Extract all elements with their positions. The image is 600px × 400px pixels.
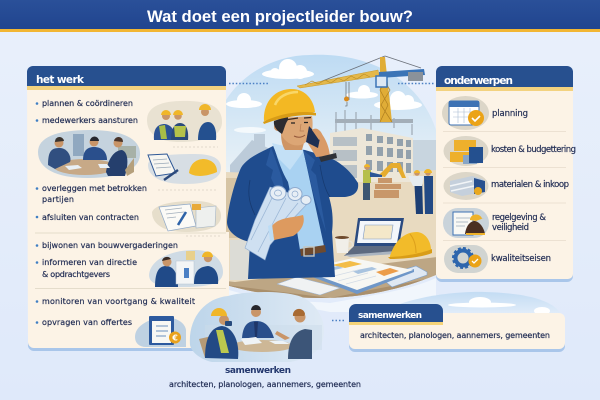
belt	[300, 245, 326, 256]
excavator	[378, 163, 406, 178]
cloud backdrop	[380, 292, 562, 316]
task list: bijwonen van bouwvergaderingen	[42, 241, 178, 250]
caption: samenwerken: samenwerken	[225, 366, 291, 376]
clouds	[226, 59, 422, 133]
shirt	[275, 149, 324, 250]
topic: materialen & inkoop	[444, 172, 569, 200]
documents on table	[277, 258, 427, 295]
task list: monitoren van voortgang & kwaliteit	[42, 297, 195, 306]
skyline	[230, 134, 436, 172]
illustration: quote checklist	[135, 316, 186, 347]
topic: kosten & budgettering	[444, 136, 576, 166]
illustration: quote checklist: €	[171, 334, 178, 342]
task list: informeren van directie	[42, 258, 137, 267]
task list: medewerkers aansturen	[42, 116, 138, 125]
caption: samenwerken: architecten, planologen, aannemers, gemeenten	[169, 380, 361, 389]
hand holding plans	[272, 215, 304, 240]
caption: samenwerken	[169, 366, 361, 389]
laptop	[344, 218, 404, 257]
illustration: clipboard and hard hat	[148, 154, 221, 184]
panel heading	[436, 66, 573, 91]
task list: afsluiten van contracten	[42, 213, 139, 222]
panel heading: onderwerpen	[444, 75, 513, 87]
topic: kosten & budgettering: kosten & budgettering	[491, 145, 576, 155]
topic: kwaliteitseisen: kwaliteitseisen	[491, 254, 551, 264]
panel: het werk	[27, 66, 229, 351]
blueprint rolls	[245, 186, 311, 260]
task list: plannen & coördineren	[42, 99, 133, 108]
title: Wat doet een projectleider bouw?	[147, 8, 413, 26]
ground	[226, 170, 436, 300]
task list: overleggen met betrokken	[42, 184, 147, 193]
title banner	[0, 0, 600, 32]
connector dots right	[398, 82, 434, 84]
cloud under central scene	[229, 278, 436, 312]
worker in safety vest	[363, 164, 382, 200]
illustration: meeting	[38, 130, 140, 178]
two site managers with plan	[408, 169, 433, 214]
coffee cup	[335, 236, 353, 253]
bricks	[374, 178, 401, 198]
task list: opvragen van offertes	[42, 318, 132, 327]
illustration: contract	[152, 201, 221, 232]
table	[226, 257, 437, 300]
sleeve fold	[248, 165, 330, 215]
panel heading	[27, 66, 226, 90]
illustration: workers	[147, 101, 222, 142]
topic: regelgeving & veiligheid: regelgeving &	[492, 213, 546, 223]
yellow hard hat on table	[388, 232, 432, 259]
collaboration partners: architecten, planologen, aannemers, gemeenten	[360, 331, 550, 340]
topic: kwaliteitseisen	[444, 245, 551, 273]
panel heading	[349, 304, 443, 325]
clouds on backdrop	[448, 297, 550, 315]
hard hat	[263, 89, 316, 124]
topic: planning: planning	[492, 109, 528, 119]
project leader figure	[227, 89, 358, 279]
building under construction	[330, 110, 413, 182]
panel heading: het werk	[36, 74, 85, 86]
panel: samenwerken	[349, 304, 565, 352]
task list	[36, 99, 195, 327]
phone and hand	[306, 126, 337, 162]
connector dots bottom	[332, 320, 346, 322]
panel heading: samenwerken	[358, 311, 422, 321]
connector dots left	[229, 82, 268, 84]
central illustration: project leader on site	[226, 50, 437, 300]
head	[279, 116, 313, 145]
task list: partijen	[42, 195, 74, 204]
task list: & opdrachtgevers	[42, 270, 110, 279]
topic: regelgeving & veiligheid	[443, 208, 546, 238]
jacket	[227, 146, 358, 279]
lapels	[266, 148, 284, 187]
topic: regelgeving & veiligheid: veiligheid	[492, 223, 529, 233]
panel: onderwerpen	[436, 66, 576, 282]
illustration: samenwerken meeting	[190, 292, 324, 362]
tower crane	[297, 56, 425, 122]
topic: materialen & inkoop: materialen & inkoop	[491, 180, 569, 190]
topic: planning	[442, 96, 528, 130]
neck	[281, 134, 304, 150]
illustration: briefing	[149, 250, 223, 287]
